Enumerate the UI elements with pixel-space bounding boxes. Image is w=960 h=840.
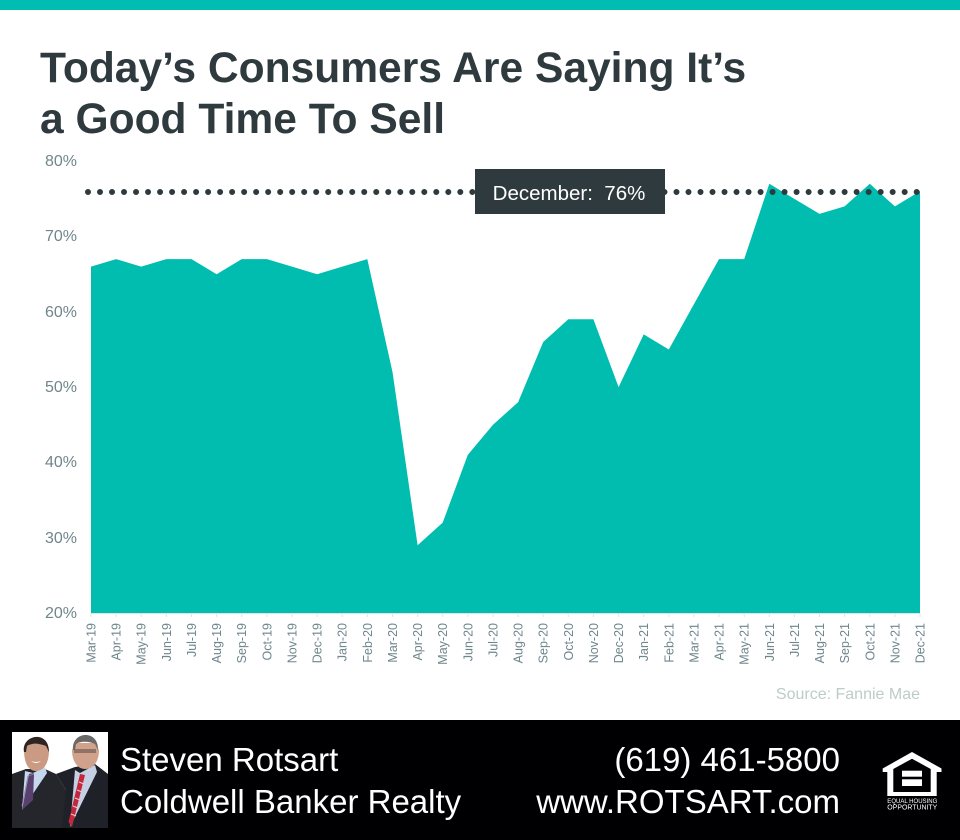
x axis month labels: Mar-21 (687, 623, 701, 663)
x axis month labels: May-19 (135, 623, 149, 665)
x axis month labels: Aug-20 (512, 623, 526, 663)
agent photo (12, 732, 108, 828)
x axis month labels: Nov-19 (286, 623, 300, 663)
x axis month labels: Apr-19 (110, 623, 124, 661)
footer band (0, 720, 960, 840)
x axis month labels: Sep-19 (235, 623, 249, 663)
icon: equal housing opportunity: OPPORTUNITY (887, 804, 938, 811)
top accent bar (0, 0, 960, 10)
x axis month labels: Apr-21 (712, 623, 726, 661)
x axis month labels: Jan-21 (637, 623, 651, 661)
y axis labels: 80% (45, 153, 77, 170)
phone and website (535, 741, 840, 820)
dotted reference line at 76% (88, 189, 919, 195)
x axis month labels: Jun-19 (160, 623, 174, 661)
phone and website: www.ROTSART.com (535, 783, 840, 820)
icon: equal housing opportunity (883, 752, 942, 811)
agent name and brokerage (120, 741, 462, 820)
title: Today’s Consumers Are Saying It’s (40, 44, 746, 92)
y axis labels: 30% (45, 530, 77, 547)
y axis labels: 40% (45, 454, 77, 471)
x axis month labels: Dec-20 (612, 623, 626, 663)
x axis month labels: Sep-21 (838, 623, 852, 663)
y axis labels: 50% (45, 379, 77, 396)
title: a Good Time To Sell (40, 95, 445, 143)
x axis month labels: Aug-21 (813, 623, 827, 663)
icon: equal housing opportunity: EQUAL HOUSING (887, 799, 938, 805)
x axis month labels: Dec-19 (311, 623, 325, 663)
callout: December 76%: December: 76% (493, 182, 645, 205)
x axis month labels: Apr-20 (411, 623, 425, 661)
agent name and brokerage: Steven Rotsart (120, 741, 338, 778)
x axis month labels: May-21 (738, 623, 752, 665)
x axis month labels: May-20 (436, 623, 450, 665)
y axis labels: 20% (45, 605, 77, 622)
left man (12, 737, 66, 828)
callout: December 76% (475, 169, 665, 214)
x axis month labels: Mar-19 (84, 623, 98, 663)
y axis labels (45, 153, 77, 622)
x axis month labels: Oct-20 (562, 623, 576, 661)
y axis labels: 60% (45, 304, 77, 321)
area chart (91, 184, 920, 613)
x axis line and ticks (91, 613, 920, 617)
x axis month labels: Nov-20 (587, 623, 601, 663)
source note: Source: Fannie Mae (776, 686, 920, 703)
x axis month labels: Jun-21 (763, 623, 777, 661)
x axis month labels: Jul-20 (486, 623, 500, 657)
right man (56, 735, 108, 828)
x axis month labels (84, 623, 928, 665)
x axis month labels: Feb-21 (662, 623, 676, 663)
agent name and brokerage: Coldwell Banker Realty (120, 783, 462, 820)
x axis month labels: Mar-20 (386, 623, 400, 663)
x axis month labels: Oct-19 (260, 623, 274, 661)
x axis month labels: Jul-21 (788, 623, 802, 657)
x axis month labels: Jun-20 (461, 623, 475, 661)
x axis month labels: Sep-20 (537, 623, 551, 663)
title (40, 44, 746, 143)
y axis labels: 70% (45, 228, 77, 245)
x axis month labels: Nov-21 (888, 623, 902, 663)
x axis month labels: Jul-19 (185, 623, 199, 657)
x axis month labels: Aug-19 (210, 623, 224, 663)
x axis month labels: Dec-21 (914, 623, 928, 663)
x axis month labels: Oct-21 (863, 623, 877, 661)
x axis month labels: Jan-20 (336, 623, 350, 661)
x axis month labels: Feb-20 (361, 623, 375, 663)
phone and website: (619) 461-5800 (614, 741, 840, 778)
